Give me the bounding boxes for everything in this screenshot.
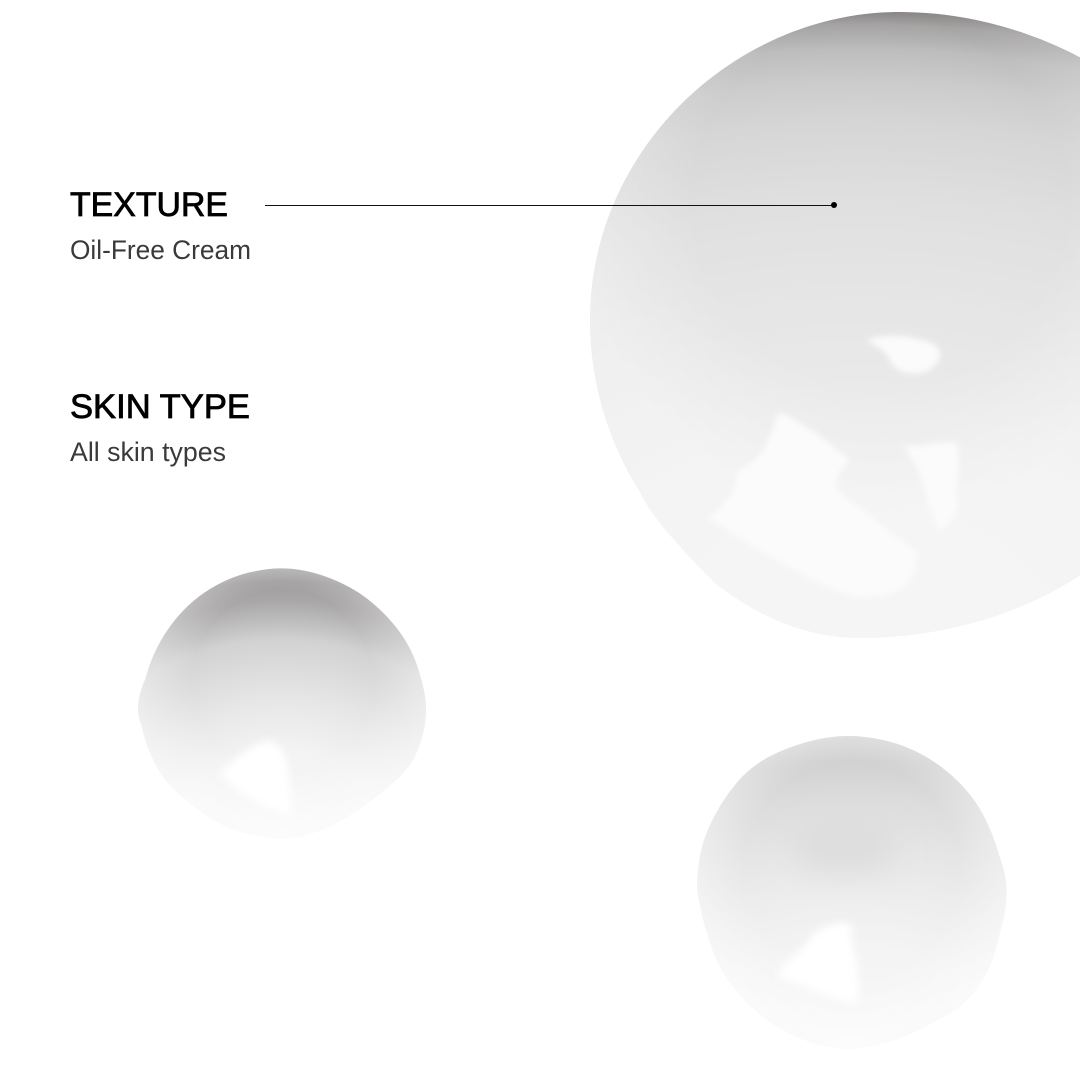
heading: skin type: SKIN TYPE bbox=[70, 388, 250, 426]
leader line with dot bbox=[265, 202, 837, 208]
highlight: center gloss bbox=[866, 336, 940, 374]
value: all skin types: All skin types bbox=[70, 437, 226, 467]
highlight: gloss bbox=[220, 740, 292, 815]
small cream blob, left bbox=[138, 568, 426, 839]
heading: texture: TEXTURE bbox=[70, 186, 228, 224]
value: oil-free cream: Oil-Free Cream bbox=[70, 235, 251, 265]
medium cream blob, bottom right bbox=[697, 736, 1007, 1049]
shading: central dimple bbox=[793, 826, 897, 874]
texture label bbox=[70, 186, 251, 265]
skin type label bbox=[70, 388, 250, 467]
highlight: lower gloss bbox=[708, 412, 918, 597]
large cream blob bbox=[590, 12, 1080, 638]
highlight: right gloss bbox=[903, 442, 958, 530]
highlight: gloss bbox=[777, 923, 859, 1005]
